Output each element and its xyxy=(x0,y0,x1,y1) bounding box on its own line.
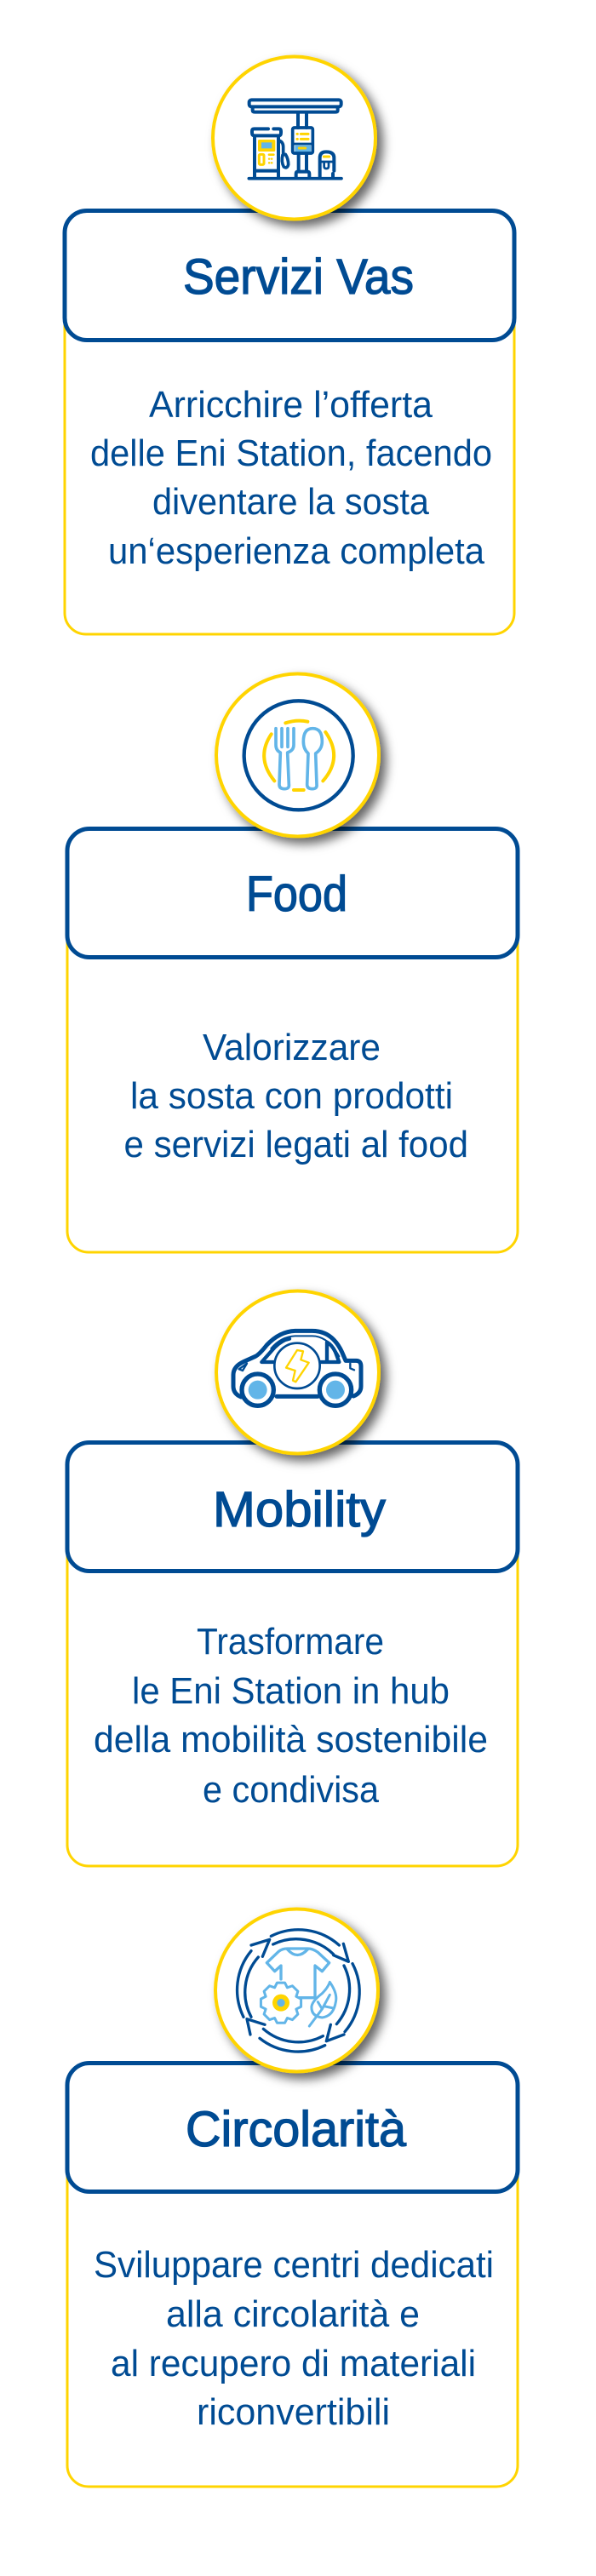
text block: Servizi Vas description xyxy=(90,384,492,572)
icon: fuel station xyxy=(249,100,341,179)
header box: Servizi Vas xyxy=(65,211,514,341)
header box: Mobility xyxy=(67,1442,518,1571)
body card: Food xyxy=(67,877,518,1252)
text block: Circolarità description: Sviluppare centri dedicati xyxy=(94,2244,494,2286)
text block: Food description: la sosta con prodotti xyxy=(130,1075,453,1117)
text block: Food description: e servizi legati al food xyxy=(124,1124,468,1165)
text block: Mobility description: della mobilità sostenibile xyxy=(94,1719,488,1760)
text block: Circolarità description: riconvertibili xyxy=(197,2391,390,2433)
text block: Food description: Valorizzare xyxy=(203,1027,381,1068)
text block: Circolarità description: alla circolarità e xyxy=(166,2293,420,2335)
icon: plate with fork and spoon xyxy=(244,701,353,810)
text block: Servizi Vas description: diventare la sosta xyxy=(152,481,429,523)
body card: Mobility xyxy=(67,1490,518,1866)
text block: Circolarità description: al recupero di materiali xyxy=(111,2343,476,2384)
text block: Servizi Vas description: Arricchire l’offerta xyxy=(149,384,433,426)
icon disc: Food xyxy=(216,674,379,836)
icon disc: Servizi Vas xyxy=(213,56,375,220)
heading: Food: Food xyxy=(246,867,347,922)
text block: Servizi Vas description: delle Eni Station, facendo xyxy=(90,432,492,474)
header box: Circolarità xyxy=(67,2064,518,2191)
panel: Circolarità xyxy=(67,1909,518,2487)
text block: Mobility description: e condivisa xyxy=(203,1769,379,1811)
text block: Mobility description: le Eni Station in hub xyxy=(132,1670,450,1712)
icon: electric car xyxy=(233,1331,361,1405)
icon disc: Circolarità xyxy=(215,1909,378,2072)
text block: Mobility description: Trasformare xyxy=(197,1621,384,1663)
icon disc: Mobility xyxy=(216,1291,379,1454)
panel: Servizi Vas xyxy=(65,56,514,634)
body card: Circolarità xyxy=(67,2111,518,2487)
text block: Food description xyxy=(124,1027,468,1165)
heading: Circolarità: Circolarità xyxy=(186,2102,407,2157)
text block: Servizi Vas description: un‘esperienza completa xyxy=(108,530,484,572)
heading: Servizi Vas: Servizi Vas xyxy=(183,249,414,305)
panel: Mobility xyxy=(67,1291,518,1866)
panel: Food xyxy=(67,674,518,1252)
header box: Food xyxy=(67,829,518,957)
icon: circular economy xyxy=(238,1930,359,2052)
text block: Mobility description xyxy=(94,1621,488,1811)
text block: Circolarità description xyxy=(94,2244,494,2433)
body card: Servizi Vas xyxy=(65,255,514,634)
heading: Mobility: Mobility xyxy=(213,1482,386,1537)
